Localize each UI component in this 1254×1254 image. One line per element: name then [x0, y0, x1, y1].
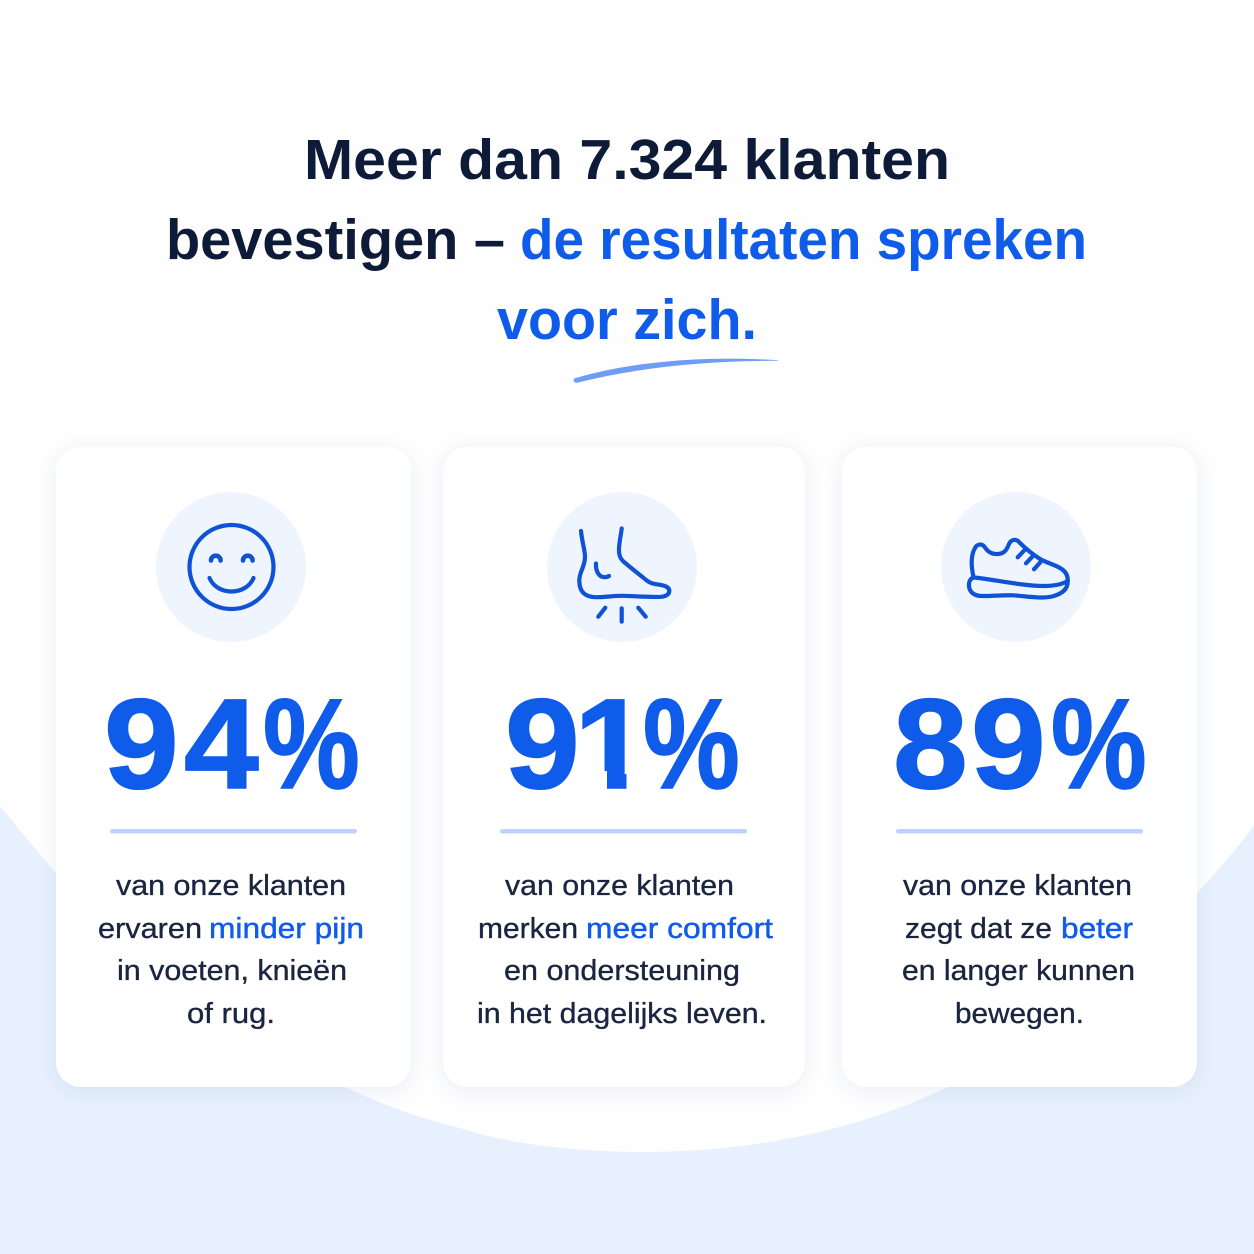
- stat: 91%: [508, 698, 738, 790]
- text block: merken: [478, 913, 578, 945]
- text block: minder pijn: [209, 913, 364, 945]
- text block: zegt dat ze: [905, 913, 1052, 945]
- text block: meer comfort: [586, 913, 773, 945]
- panel: minder pijn: [56, 447, 411, 1087]
- stat: 91%: 9: [505, 672, 580, 815]
- stat: 89%: [893, 672, 1147, 816]
- text block: bewegen.: [955, 998, 1084, 1030]
- text block: van onze klanten: [116, 870, 346, 902]
- stat: 94%: %: [263, 673, 360, 816]
- stat: 91%: 1: [574, 672, 649, 815]
- icon: smiley: [156, 492, 306, 642]
- text block: van onze klanten: [903, 870, 1132, 902]
- stat: 89%: %: [1051, 673, 1147, 816]
- text block: in het dagelijks leven.: [477, 998, 767, 1030]
- text block: van onze klanten: [505, 870, 734, 902]
- text block: in voeten, knieën: [117, 955, 347, 987]
- stat: 94%: 4: [184, 672, 259, 815]
- icon: foot: [547, 492, 697, 642]
- text block: ervaren: [98, 913, 202, 945]
- text block: beter: [1061, 913, 1133, 945]
- title: Meer dan 7.324 klanten: [304, 128, 950, 192]
- stat: 94%: [104, 672, 360, 816]
- icon: shoe: [941, 492, 1091, 642]
- title: [166, 128, 1087, 352]
- panel: beter bewegen: [842, 447, 1197, 1087]
- text block: en ondersteuning: [504, 955, 740, 987]
- title: voor zich.: [497, 288, 757, 352]
- text block: of rug.: [187, 998, 275, 1030]
- text block: [902, 870, 1135, 1030]
- stat: 94%: 9: [104, 672, 179, 815]
- text block: en langer kunnen: [902, 955, 1135, 987]
- stat: 89%: 8: [893, 672, 968, 815]
- panel: meer comfort: [443, 447, 805, 1087]
- title: de resultaten spreken: [520, 208, 1087, 272]
- stat: 89%: 9: [971, 672, 1046, 815]
- stat: 91%: %: [643, 673, 740, 816]
- text block: [477, 870, 773, 1030]
- text block: [98, 870, 364, 1030]
- title: bevestigen –: [166, 208, 505, 272]
- title underline: [574, 359, 778, 383]
